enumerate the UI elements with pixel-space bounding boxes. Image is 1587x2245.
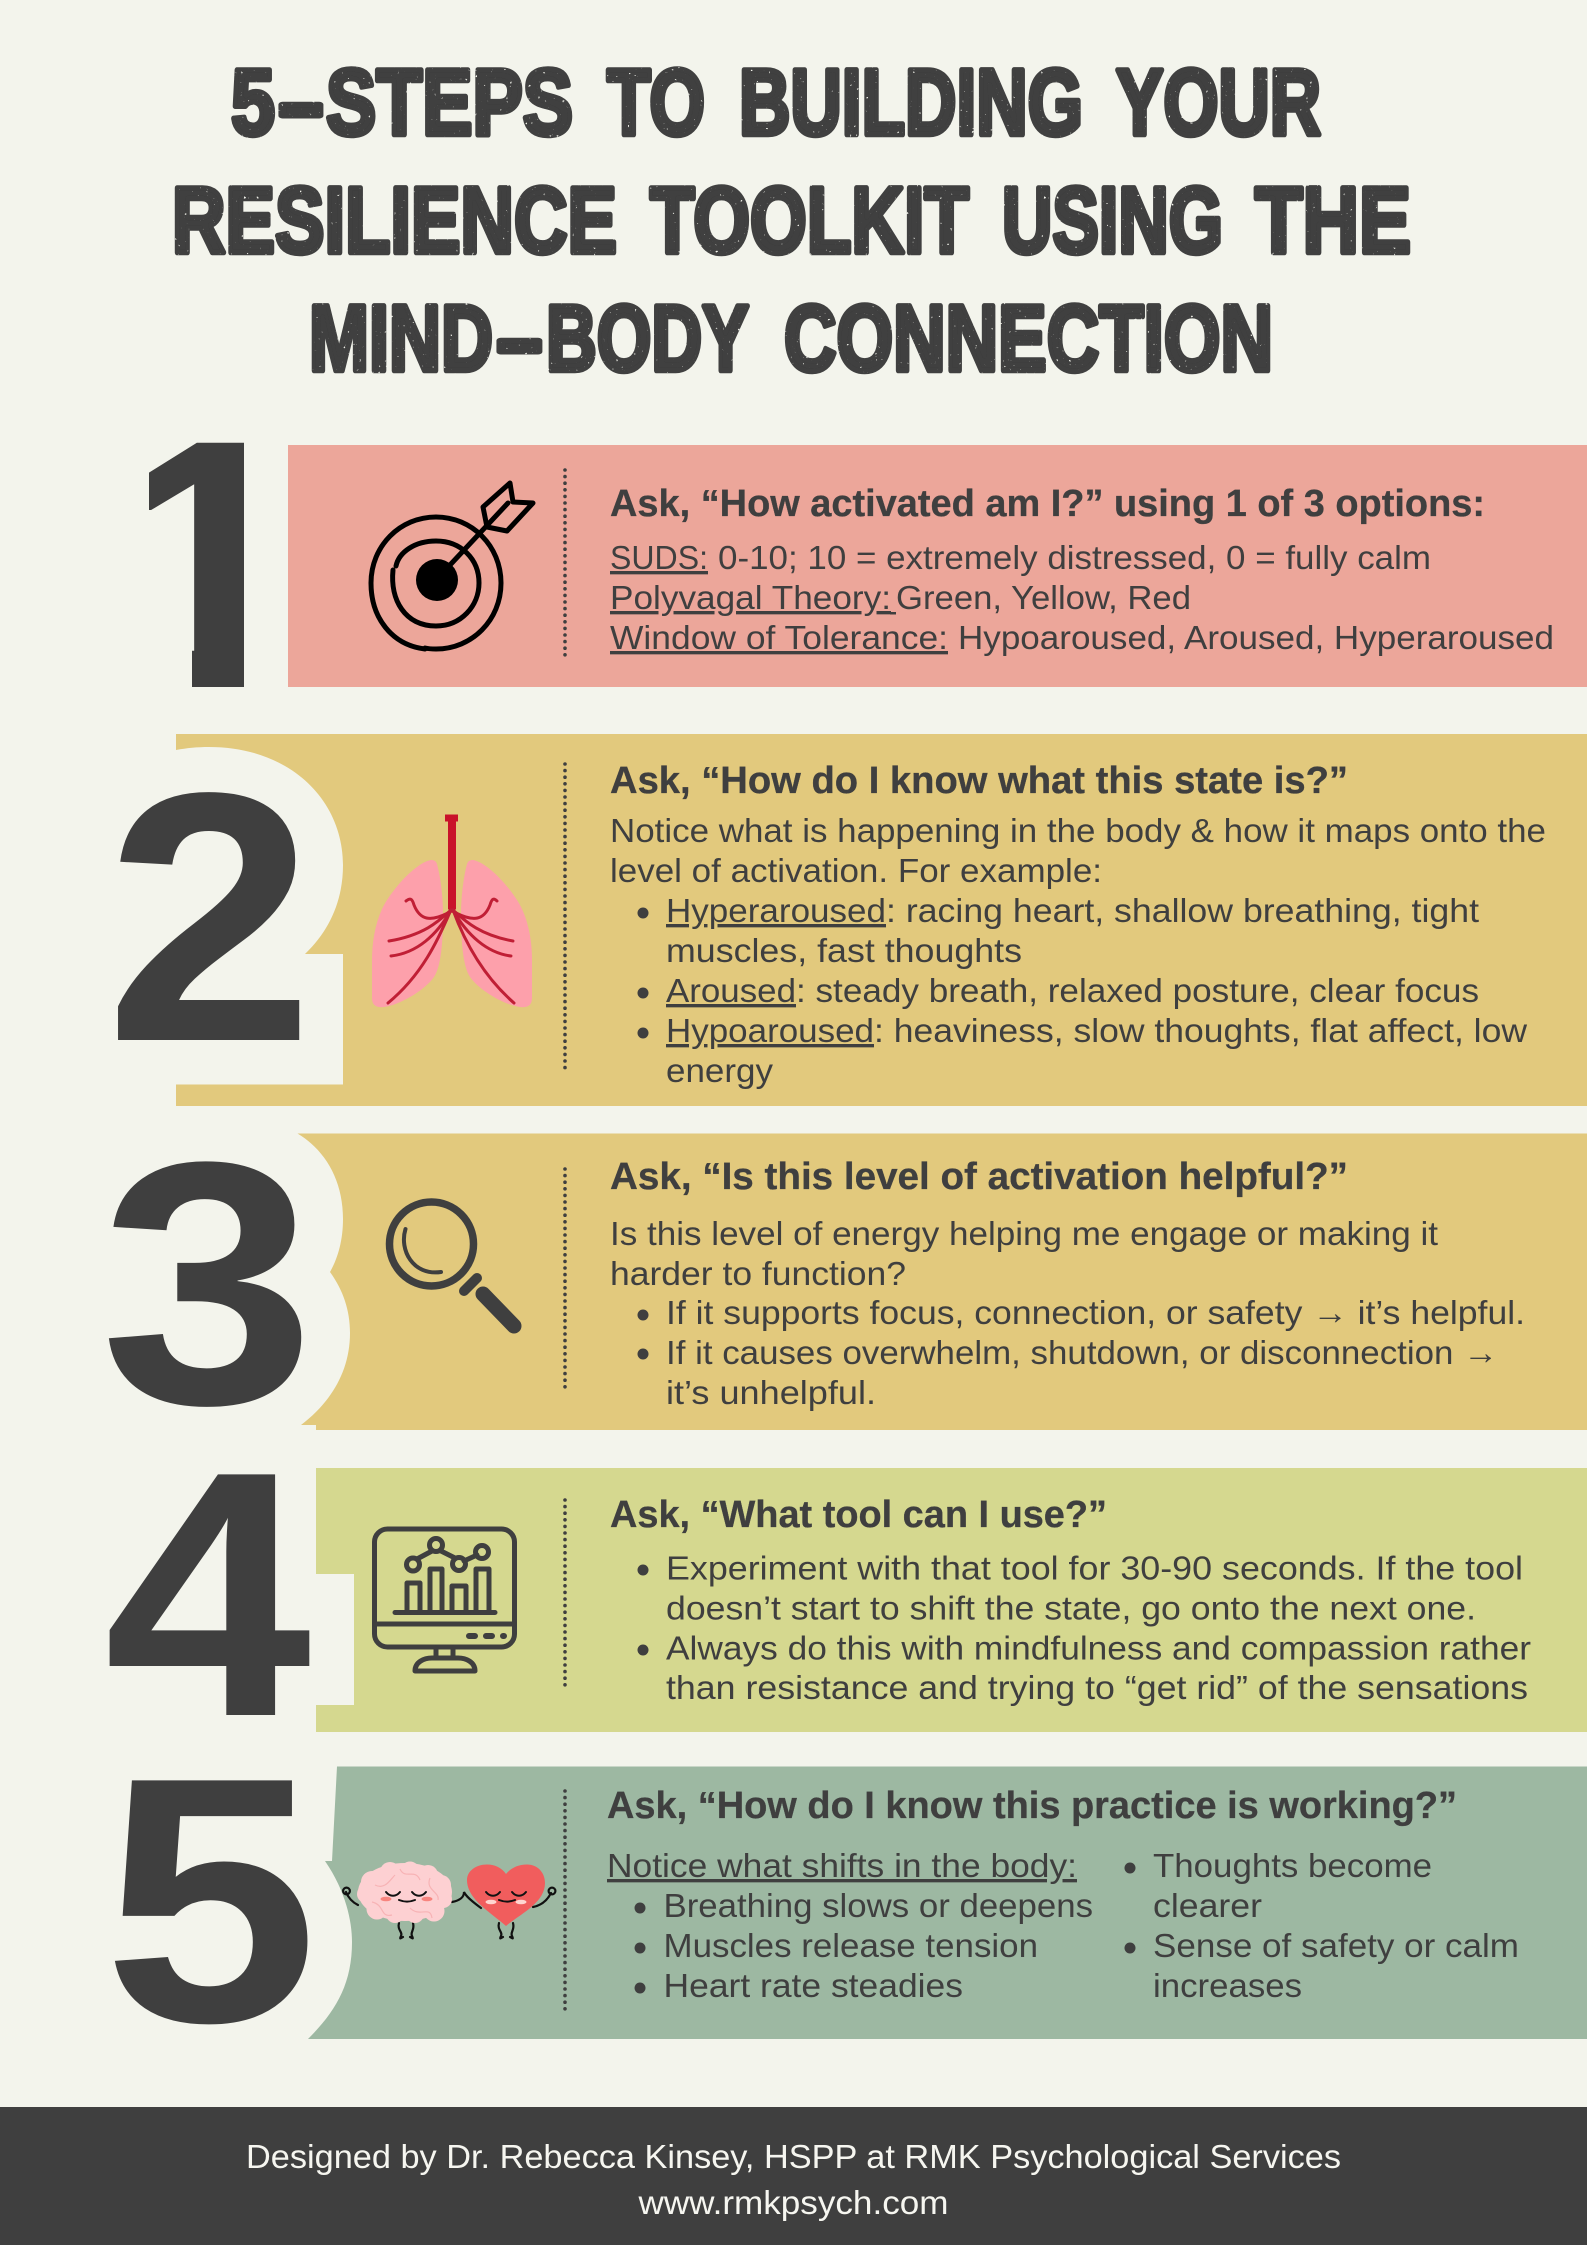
text block: activation options: Polyvagal Theory:	[610, 580, 891, 617]
icon: monitor with chart	[374, 1529, 514, 1671]
text block: activation options	[610, 540, 1554, 657]
number 1: 1	[108, 365, 313, 762]
title: YOUR	[1116, 50, 1321, 154]
divider	[563, 1791, 567, 2011]
text block: tool guidance: doesn’t start to shift the state, go onto the next one.	[666, 1590, 1476, 1628]
panel: step 5	[103, 1705, 1587, 2096]
text block: helpfulness questions: If it causes overwhelm, shutdown, or disconnection →	[666, 1335, 1498, 1372]
text block: body shifts left column: Notice what shifts in the body:	[607, 1848, 1077, 1885]
text block: body shifts right column	[1124, 1848, 1519, 2005]
title: USING	[1002, 168, 1223, 272]
heading: Ask, “Is this level of activation helpful?”	[610, 1156, 1348, 1198]
text block: body shifts right column: increases	[1153, 1968, 1302, 2005]
text block: body states: Hypoaroused	[666, 1013, 874, 1050]
text block: body states: Hyperaroused	[666, 893, 886, 930]
number 4: 4	[104, 1399, 314, 1790]
panel: step 3	[100, 1090, 1587, 1477]
text block: helpfulness questions: Is this level of energy helping me engage or making it	[610, 1216, 1439, 1253]
text block: tool guidance	[638, 1550, 1531, 1707]
footer website: www.rmkpsych.com	[637, 2185, 948, 2222]
divider	[563, 470, 567, 656]
title: 5	[231, 50, 275, 154]
text block: tool guidance: Always do this with mindfulness and compassion rather	[666, 1630, 1531, 1668]
text block: body states: : heaviness, slow thoughts, flat affect, low	[874, 1013, 1528, 1050]
text block: activation options: 0-10; 10 = extremely distressed, 0 = fully calm	[718, 540, 1431, 577]
heading: Ask, “How do I know what this state is?”	[610, 760, 1348, 802]
title: STEPS	[326, 50, 573, 154]
icon: lungs	[372, 814, 532, 1007]
number 2: 2	[105, 719, 314, 1116]
text block: body states: muscles, fast thoughts	[666, 933, 1022, 970]
text block: helpfulness questions	[610, 1216, 1525, 1412]
text block: body shifts left column: Heart rate steadies	[664, 1968, 963, 2005]
text block: helpfulness questions: harder to function?	[610, 1256, 906, 1293]
panel: step 2	[105, 719, 1587, 1116]
text block: body states: : steady breath, relaxed posture, clear focus	[796, 973, 1479, 1010]
text block: body states: Aroused	[666, 973, 796, 1010]
heading: Ask, “What tool can I use?”	[610, 1494, 1107, 1536]
text block: body states: Notice what is happening in the body & how it maps onto the	[610, 813, 1546, 850]
text block: activation options: SUDS:	[610, 540, 708, 577]
title: -	[495, 286, 544, 390]
text block: body shifts right column: clearer	[1153, 1888, 1262, 1925]
heading: Ask, “How do I know this practice is working?”	[607, 1785, 1457, 1827]
divider	[563, 1500, 567, 1687]
text block: tool guidance: than resistance and trying to “get rid” of the sensations	[666, 1670, 1528, 1707]
divider	[563, 1169, 567, 1389]
title: BODY	[546, 286, 749, 390]
title: THE	[1255, 168, 1411, 272]
text block: body states: : racing heart, shallow breathing, tight	[886, 893, 1480, 930]
text block: helpfulness questions: If it supports focus, connection, or safety → it’s helpful.	[666, 1295, 1525, 1332]
text block: body states	[610, 813, 1546, 1090]
icon: magnifying glass	[390, 1202, 514, 1326]
number 5: 5	[103, 1705, 318, 2096]
icon: target with arrow	[371, 483, 533, 649]
title: BUILDING	[739, 50, 1083, 154]
text block: activation options: Green, Yellow, Red	[896, 580, 1191, 617]
title	[172, 50, 1411, 390]
text block: helpfulness questions: it’s unhelpful.	[666, 1375, 876, 1412]
text block: body shifts right column: Thoughts become	[1153, 1848, 1432, 1885]
text block: activation options: Window of Tolerance:	[610, 620, 948, 657]
number 3: 3	[100, 1090, 315, 1477]
text block: body states: energy	[666, 1053, 773, 1090]
title: TOOLKIT	[650, 168, 969, 272]
text block: body shifts left column: Muscles release tension	[664, 1928, 1038, 1965]
heading: Ask, “How activated am I?” using 1 of 3 options:	[610, 483, 1485, 525]
title: CONNECTION	[784, 286, 1273, 390]
title: -	[277, 50, 325, 154]
panel: step 1	[149, 442, 1587, 687]
title: MIND	[309, 286, 493, 390]
text block: body states: level of activation. For example:	[610, 853, 1102, 890]
text block: body shifts left column: Breathing slows or deepens	[664, 1888, 1093, 1925]
text block: body shifts right column: Sense of safety or calm	[1153, 1928, 1519, 1965]
icon: brain and heart characters	[343, 1862, 555, 1938]
title: RESILIENCE	[172, 168, 617, 272]
panel: step 4	[104, 1399, 1587, 1790]
title: TO	[607, 50, 705, 154]
text block: body shifts left column	[607, 1848, 1093, 2005]
text block: tool guidance: Experiment with that tool for 30-90 seconds. If the tool	[666, 1550, 1523, 1588]
footer credit: Designed by Dr. Rebecca Kinsey, HSPP at RMK Psychological Services	[246, 2139, 1341, 2176]
text block: activation options: Hypoaroused, Aroused, Hyperaroused	[958, 620, 1554, 657]
divider	[563, 764, 567, 1071]
footer	[0, 2107, 1587, 2245]
